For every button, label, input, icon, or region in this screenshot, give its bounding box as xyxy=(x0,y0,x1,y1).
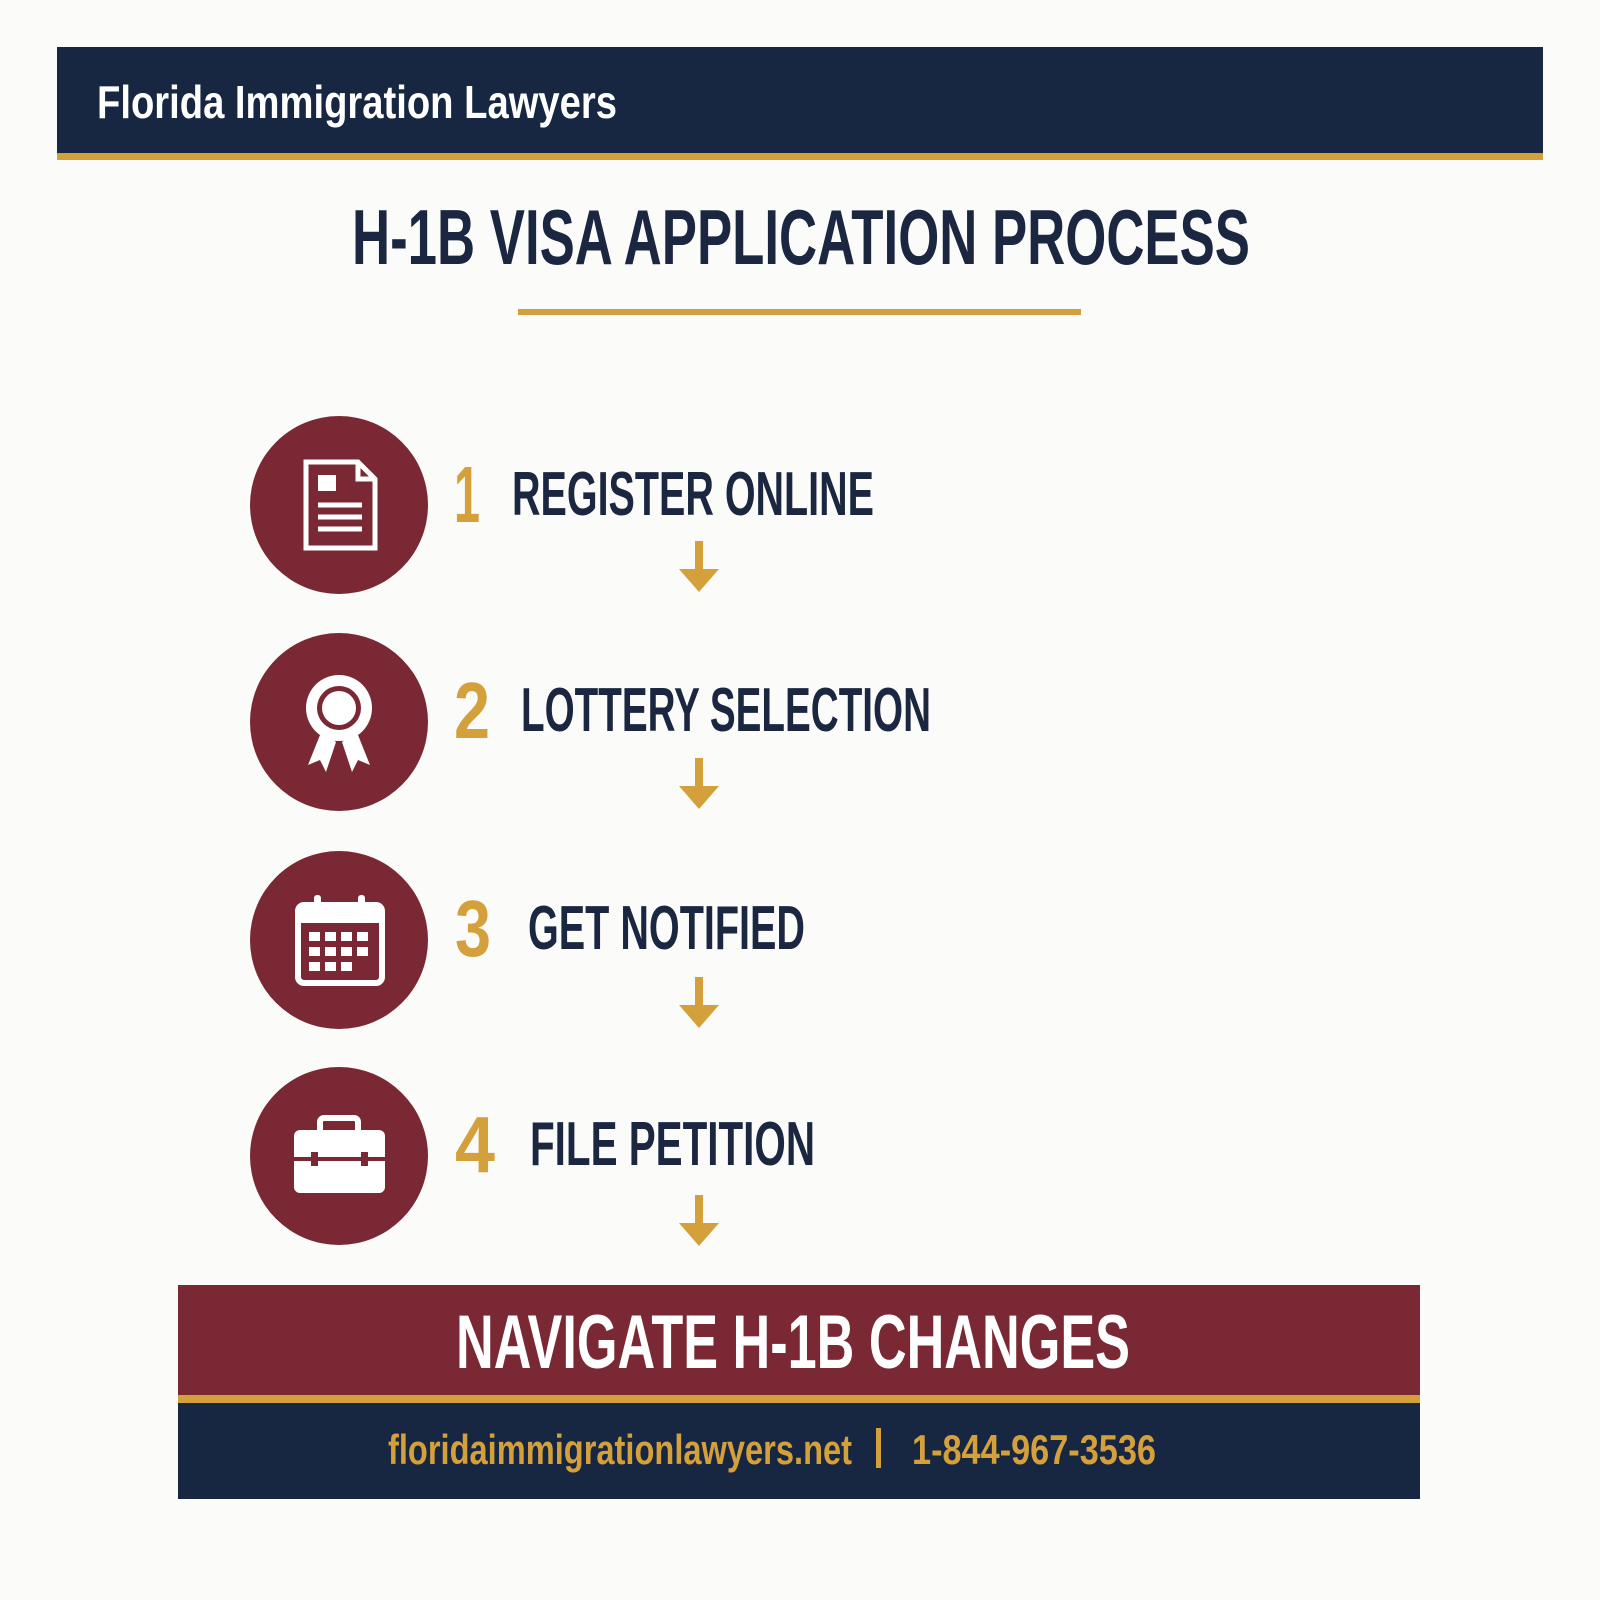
header text: Florida Immigration Lawyers xyxy=(97,76,617,128)
step 3 xyxy=(250,851,805,1029)
label: LOTTERY SELECTION xyxy=(521,676,931,745)
banner heading: NAVIGATE H-1B CHANGES xyxy=(456,1300,1130,1385)
call to action banner: 1-844-967-3536 xyxy=(912,1426,1156,1473)
number 4: 4 xyxy=(455,1100,495,1189)
label: FILE PETITION xyxy=(530,1110,815,1179)
step 2 xyxy=(250,633,931,811)
icon: document xyxy=(306,462,375,548)
icon: calendar xyxy=(298,895,382,983)
arrow xyxy=(679,758,719,809)
number 2: 2 xyxy=(454,666,490,755)
contact line: floridaimmigrationlawyers.net xyxy=(388,1426,852,1473)
call to action banner xyxy=(178,1285,1420,1499)
number 1: 1 xyxy=(454,450,480,539)
label: REGISTER ONLINE xyxy=(512,460,874,529)
arrow xyxy=(679,1195,719,1246)
icon: briefcase xyxy=(294,1118,385,1193)
step 4 xyxy=(250,1067,815,1246)
arrow xyxy=(679,977,719,1028)
label: GET NOTIFIED xyxy=(528,894,805,963)
step 1 xyxy=(250,416,874,594)
number 3: 3 xyxy=(455,884,491,973)
arrow xyxy=(679,541,719,592)
header bar xyxy=(57,47,1543,160)
icon: award xyxy=(306,675,372,772)
title underline xyxy=(518,309,1081,315)
